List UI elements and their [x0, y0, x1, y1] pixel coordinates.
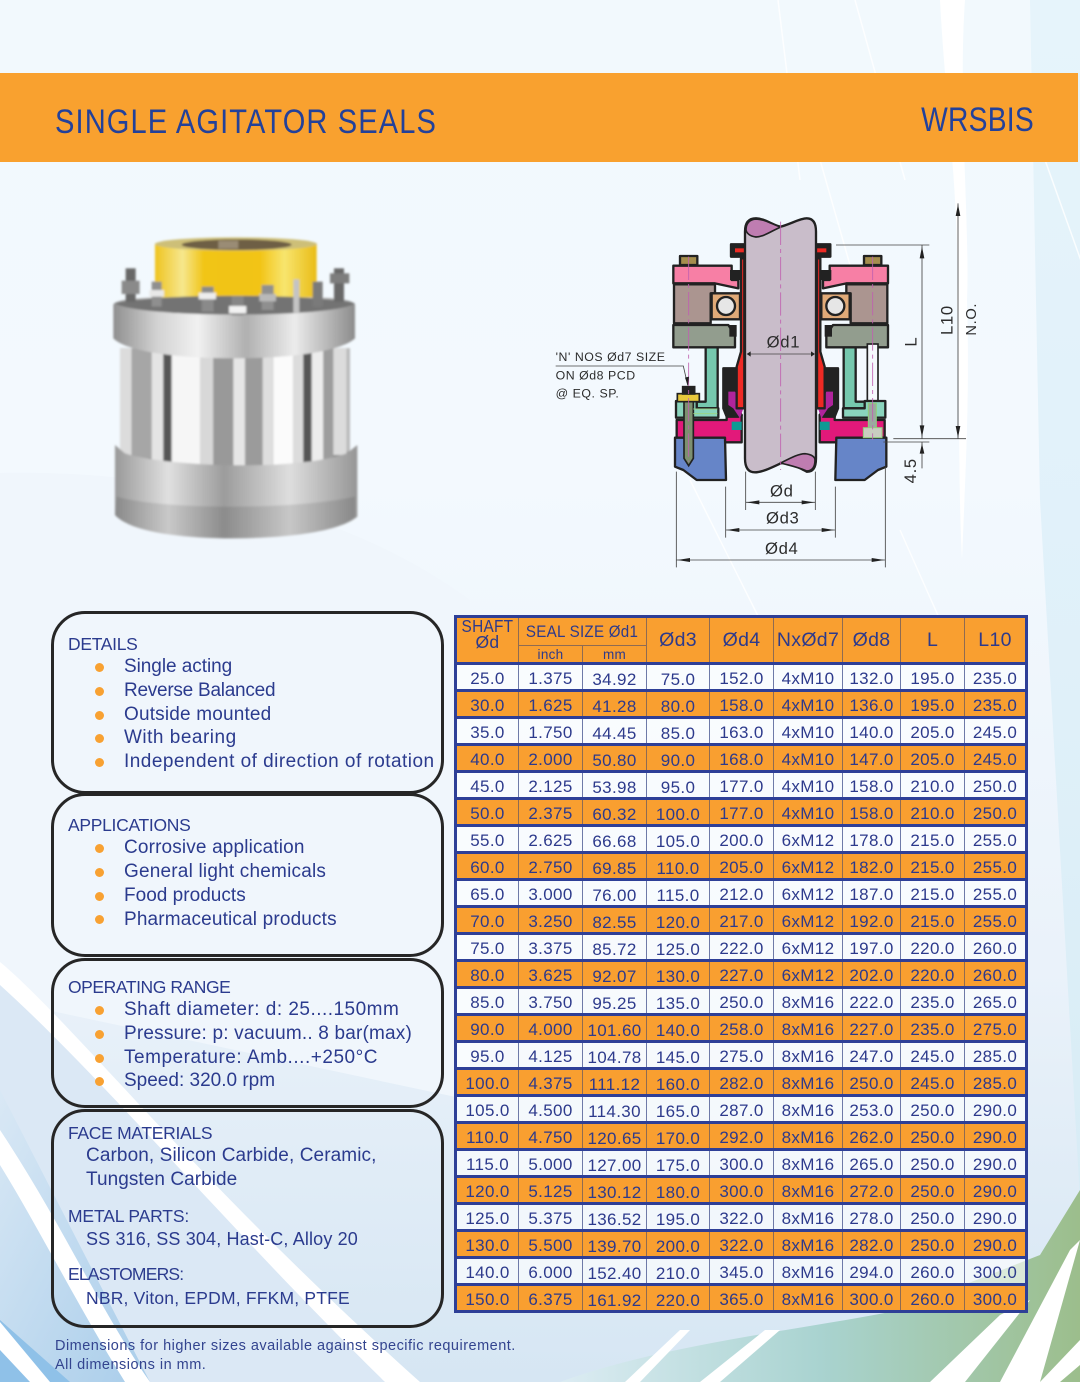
- dimensions table: 255.0: [973, 830, 1017, 850]
- dimensions table: 136.0: [849, 696, 894, 715]
- text: metal parts: SS 316, SS 304, Hast-C, Alloy 20: [86, 1229, 358, 1249]
- upper flange: [113, 297, 355, 358]
- panel: operating range: [51, 958, 444, 1108]
- dimensions table: 365.0: [719, 1290, 764, 1308]
- dimensions table: 300.0: [973, 1262, 1017, 1282]
- dimensions table: 215.0: [910, 912, 955, 930]
- dimensions table: 290.0: [973, 1236, 1017, 1254]
- dimensions table: 255.0: [973, 858, 1017, 876]
- dimensions table: 6xM12: [782, 885, 834, 904]
- dimensions table: 220.0: [656, 1291, 700, 1310]
- dimensions table: 227.0: [719, 966, 764, 984]
- dimensions table: 282.0: [849, 1236, 894, 1255]
- dimensions table: 85.0: [470, 992, 505, 1012]
- dimensions table: 290.0: [973, 1100, 1017, 1120]
- dimensions table: 95.0: [661, 778, 695, 797]
- list: details: Single acting: [124, 656, 232, 677]
- dimensions table: 6xM12: [782, 912, 834, 931]
- dimensions table: 294.0: [849, 1263, 894, 1282]
- dimensions table: 2.375: [528, 804, 573, 822]
- dimensions table: 95.25: [592, 994, 637, 1013]
- dimensions table: 258.0: [719, 1020, 764, 1038]
- footnote: All dimensions in mm.: [55, 1357, 206, 1373]
- dimensions table: 3.250: [528, 912, 573, 930]
- dimensions table: 105.0: [656, 832, 700, 851]
- flange top face: [115, 296, 355, 315]
- dimensions table: 290.0: [973, 1128, 1017, 1146]
- dimensions table: 245.0: [973, 750, 1017, 768]
- dimensions table: 215.0: [910, 830, 955, 850]
- dimensions table: 80.0: [661, 697, 695, 716]
- dimensions table: 250.0: [910, 1154, 955, 1174]
- dimensions table: 4.000: [528, 1020, 573, 1038]
- dimensions table: 250.0: [910, 1128, 955, 1146]
- dimensions table: 50.0: [470, 804, 505, 822]
- dimensions table: 222.0: [849, 993, 894, 1012]
- dimensions table: 250.0: [910, 1182, 955, 1200]
- dimensions table: 192.0: [849, 912, 894, 931]
- heading: operating range: OPERATING RANGE: [68, 977, 230, 997]
- dimensions table: 227.0: [849, 1020, 894, 1039]
- dimensions table: 6.375: [528, 1290, 573, 1308]
- heading: elastomers: ELASTOMERS:: [68, 1264, 183, 1284]
- dimensions table: 1.625: [528, 696, 573, 714]
- dimensions table: 4xM10: [782, 777, 834, 796]
- dimensions table: 101.60: [587, 1021, 642, 1040]
- dimensions table: 250.0: [910, 1236, 955, 1254]
- dimensions table: 6xM12: [782, 831, 834, 850]
- dimensions table: 210.0: [910, 776, 955, 796]
- dimensions table: 145.0: [656, 1048, 700, 1067]
- dimensions table: 135.0: [656, 994, 700, 1013]
- list: details: Reverse Balanced: [124, 680, 275, 701]
- right half of seal: [816, 244, 888, 480]
- callout: bolt note: [556, 350, 666, 401]
- dimensions table: 30.0: [470, 696, 505, 714]
- dimension labels: N.O.: [964, 303, 980, 336]
- dimensions table: 4xM10: [782, 804, 834, 823]
- dimension labels: L10: [938, 305, 957, 335]
- dimension lines and arrows: [556, 203, 966, 567]
- tie rod on right side: [863, 344, 882, 438]
- dimensions table: 147.0: [849, 750, 894, 769]
- dimensions table: 260.0: [973, 966, 1017, 984]
- title: SINGLE AGITATOR SEALS: [55, 103, 437, 141]
- product code: WRSBIS: [921, 101, 1034, 139]
- dimensions table: 250.0: [910, 1100, 955, 1120]
- dimensions table: [454, 615, 1028, 1313]
- dimensions table: 104.78: [587, 1048, 642, 1067]
- dimension labels: [765, 303, 980, 558]
- list: details: Independent of direction of rotation: [124, 751, 435, 772]
- dimension labels: L: [902, 337, 921, 347]
- dimensions table: 25.0: [470, 668, 505, 688]
- dimensions table: 5.500: [528, 1236, 573, 1254]
- dimensions table: 300.0: [849, 1290, 894, 1309]
- dimension labels: 4.5: [901, 458, 920, 483]
- dimensions table: 6xM12: [782, 939, 834, 958]
- cage with bars: [120, 348, 350, 472]
- dimensions table: 158.0: [719, 696, 764, 714]
- dimensions table: 8xM16: [782, 1047, 834, 1066]
- dimensions table: 265.0: [973, 992, 1017, 1012]
- bolts: [122, 268, 349, 315]
- dimensions table: 182.0: [849, 858, 894, 877]
- list: applications: General light chemicals: [124, 861, 326, 882]
- dimensions table: 100.0: [656, 805, 700, 824]
- dimensions table: 275.0: [973, 1020, 1017, 1038]
- dimensions table: 278.0: [849, 1209, 894, 1228]
- dimensions table: 287.0: [719, 1100, 764, 1120]
- dimensions table: 235.0: [973, 696, 1017, 714]
- dimensions table: 205.0: [719, 858, 764, 876]
- dimensions table: 3.625: [528, 966, 573, 984]
- dimensions table: 250.0: [719, 992, 764, 1012]
- dimensions table: 2.750: [528, 858, 573, 876]
- list: details: Outside mounted: [124, 704, 271, 725]
- dimensions table: 290.0: [973, 1154, 1017, 1174]
- dimensions table: 8xM16: [782, 1236, 834, 1255]
- dimensions table: 140.0: [465, 1262, 510, 1282]
- dimensions table: 66.68: [592, 832, 637, 851]
- dimensions table: 127.00: [587, 1156, 642, 1175]
- dimensions table: 222.0: [719, 938, 764, 958]
- dimensions table: 158.0: [849, 777, 894, 796]
- dimensions table: 163.0: [719, 722, 764, 742]
- dimensions table: 90.0: [661, 751, 695, 770]
- dimensions table: 195.0: [910, 668, 955, 688]
- dimensions table: 110.0: [466, 1128, 509, 1146]
- heading: applications: APPLICATIONS: [68, 815, 190, 835]
- dimensions table: 85.72: [592, 940, 637, 959]
- product photo: [112, 236, 359, 540]
- footnote: Dimensions for higher sizes available against specific requirement.: [55, 1338, 516, 1354]
- dimensions table: Ød8: [853, 628, 890, 650]
- dimensions table: 285.0: [973, 1074, 1017, 1092]
- dimensions table: 65.0: [470, 884, 505, 904]
- dimensions table: 125.0: [656, 940, 700, 959]
- dimensions table: 3.375: [528, 938, 573, 958]
- dimensions table: 260.0: [973, 938, 1017, 958]
- dimensions table: 6.000: [528, 1262, 573, 1282]
- dimensions table: 300.0: [719, 1154, 764, 1174]
- dimensions table: 250.0: [973, 776, 1017, 796]
- dimensions table: 250.0: [973, 804, 1017, 822]
- dimensions table: 2.625: [528, 830, 573, 850]
- dimensions table: 130.0: [656, 967, 700, 986]
- list: operating range: Shaft diameter: d: 25....150mm: [124, 999, 399, 1020]
- dimensions table: L: [927, 628, 938, 650]
- dimensions table: 120.65: [587, 1129, 642, 1148]
- dimensions table: 255.0: [973, 912, 1017, 930]
- dimensions table: 70.0: [470, 912, 505, 930]
- dimensions table: 205.0: [910, 722, 955, 742]
- yellow collar: [155, 237, 317, 302]
- dimensions table: 210.0: [910, 804, 955, 822]
- dimensions table: SEAL SIZE Ød1: [526, 622, 639, 640]
- dimensions table: 200.0: [719, 830, 764, 850]
- dimensions table: 235.0: [910, 992, 955, 1012]
- dimensions table: 8xM16: [782, 1209, 834, 1228]
- dimensions table: 136.52: [587, 1210, 642, 1229]
- dimensions table: 6xM12: [782, 858, 834, 877]
- list: applications: Food products: [124, 885, 246, 906]
- shaft: [745, 218, 816, 472]
- dimensions table: 4xM10: [782, 750, 834, 769]
- dimensions table: 322.0: [719, 1208, 764, 1228]
- heading: face materials: FACE MATERIALS: [68, 1123, 212, 1143]
- dimensions table: 1.375: [528, 668, 573, 688]
- dimensions table: 60.32: [592, 805, 637, 824]
- text: face materials: Carbon, Silicon Carbide, Ceramic,: [86, 1145, 377, 1166]
- header band: [0, 73, 1078, 162]
- dimensions table: 245.0: [973, 722, 1017, 742]
- dimensions table: 235.0: [910, 1020, 955, 1038]
- dimensions table: 75.0: [470, 938, 505, 958]
- dimensions table: Ød4: [723, 628, 760, 650]
- centre lines: [689, 222, 873, 470]
- dimensions table: 260.0: [910, 1262, 955, 1282]
- dimensions table: 220.0: [910, 966, 955, 984]
- dimensions table: 8xM16: [782, 1155, 834, 1174]
- dimensions table: 60.0: [470, 858, 505, 876]
- dimensions table: 290.0: [973, 1182, 1017, 1200]
- dimensions table: 35.0: [470, 722, 505, 742]
- dimensions table: 110.0: [656, 859, 700, 878]
- dimensions table: 8xM16: [782, 993, 834, 1012]
- dimensions table: 4.500: [528, 1100, 573, 1120]
- dimensions table: 215.0: [910, 884, 955, 904]
- dimensions table: 45.0: [470, 776, 505, 796]
- dimensions table: 165.0: [656, 1102, 700, 1121]
- dimensions table: 5.000: [528, 1154, 573, 1174]
- dimensions table: 197.0: [849, 939, 894, 958]
- dimensions table: 202.0: [849, 966, 894, 985]
- dimensions table: 160.0: [656, 1075, 700, 1094]
- dimension labels: Ød1: [767, 333, 800, 352]
- dimensions table: 235.0: [973, 668, 1017, 688]
- dimensions table: 187.0: [849, 885, 894, 904]
- dimensions table: 82.55: [592, 913, 637, 932]
- dimensions table: L10: [978, 628, 1012, 650]
- dimensions table: NxØd7: [777, 628, 839, 650]
- dimensions table: 265.0: [849, 1155, 894, 1174]
- list: operating range: Temperature: Amb....+250°C: [124, 1047, 378, 1068]
- dimensions table: 132.0: [849, 669, 894, 688]
- dimensions table: 177.0: [719, 804, 764, 822]
- dimensions table: 217.0: [719, 912, 764, 930]
- lower housing: [115, 445, 357, 538]
- dimensions table: 8xM16: [782, 1020, 834, 1039]
- dimensions table: 75.0: [661, 670, 695, 689]
- dimensions table: 115.0: [656, 886, 700, 905]
- dimension labels: Ød4: [765, 539, 798, 558]
- dimensions table: 8xM16: [782, 1074, 834, 1093]
- dimensions table: 92.07: [592, 967, 637, 986]
- dimensions table: 292.0: [719, 1128, 764, 1146]
- dimensions table: 55.0: [470, 830, 505, 850]
- arrowheads: [677, 204, 960, 562]
- dimensions table: 245.0: [910, 1046, 955, 1066]
- dimensions table: 80.0: [470, 966, 505, 984]
- text: face materials: Tungsten Carbide: [86, 1169, 237, 1190]
- callout: bolt note: ON Ød8 PCD: [556, 368, 636, 382]
- dimensions table: 139.70: [587, 1237, 642, 1256]
- left half of seal: [673, 244, 745, 480]
- dimensions table: 170.0: [656, 1129, 700, 1148]
- dimensions table: 8xM16: [782, 1128, 834, 1147]
- footnote: [55, 1338, 516, 1373]
- dimensions table: 4xM10: [782, 669, 834, 688]
- dimensions table: 8xM16: [782, 1263, 834, 1282]
- dimensions table: 253.0: [849, 1101, 894, 1120]
- dimensions table: 115.0: [466, 1154, 509, 1174]
- dimension labels: Ød: [770, 482, 794, 501]
- sectional drawing of seal: [556, 203, 980, 568]
- dimensions table: 2.000: [528, 750, 573, 768]
- dimensions table: 3.000: [528, 884, 573, 904]
- dimensions table: Ød: [476, 632, 499, 652]
- dimensions table: 262.0: [849, 1128, 894, 1147]
- dimensions table: 152.0: [719, 668, 764, 688]
- dimensions table: 8xM16: [782, 1101, 834, 1120]
- dimensions table: SHAFT: [462, 616, 513, 636]
- dimensions table: 120.0: [465, 1182, 510, 1200]
- dimensions table: mm: [603, 646, 626, 662]
- dimensions table: 275.0: [719, 1046, 764, 1066]
- dimensions table: Ød3: [659, 628, 697, 650]
- dimensions table: 140.0: [656, 1021, 700, 1040]
- dimensions table: 205.0: [910, 750, 955, 768]
- dimensions table: 5.125: [528, 1182, 573, 1200]
- dimensions table: 290.0: [973, 1208, 1017, 1228]
- hold-down bolt on left side: [677, 387, 717, 466]
- heading: details: DETAILS: [68, 634, 138, 654]
- dimensions table: 212.0: [719, 884, 764, 904]
- dimensions table: 130.0: [465, 1236, 510, 1254]
- dimensions table: 272.0: [849, 1182, 894, 1201]
- dimensions table: 215.0: [910, 858, 955, 876]
- callout: bolt note: @ EQ. SP.: [556, 387, 619, 401]
- list: applications: [95, 837, 337, 930]
- dimensions table: 1.750: [528, 722, 573, 742]
- dimensions table: 4xM10: [782, 723, 834, 742]
- dimensions table: 50.80: [592, 751, 637, 770]
- dimensions table: 195.0: [656, 1210, 700, 1229]
- panel: materials: [51, 1109, 444, 1328]
- dimensions table: 4.750: [528, 1128, 573, 1146]
- text: face materials: [86, 1145, 377, 1190]
- dimensions table: 2.125: [528, 776, 573, 796]
- dimensions table: 178.0: [849, 831, 894, 850]
- dimensions table: 76.00: [592, 886, 637, 905]
- dimensions table: 8xM16: [782, 1290, 834, 1309]
- dimensions table: 152.40: [587, 1264, 642, 1283]
- text: elastomers: NBR, Viton, EPDM, FFKM, PTFE: [86, 1288, 350, 1308]
- dimensions table: 8xM16: [782, 1182, 834, 1201]
- dimensions table: 41.28: [592, 697, 637, 716]
- dimensions table: 140.0: [849, 723, 894, 742]
- dimensions table: 250.0: [910, 1208, 955, 1228]
- dimensions table: 150.0: [465, 1290, 510, 1308]
- dimension labels: Ød3: [766, 508, 799, 527]
- dimensions table: 210.0: [656, 1264, 700, 1283]
- dimensions table: 34.92: [592, 670, 637, 689]
- dimensions table: 125.0: [465, 1208, 510, 1228]
- dimensions table: 260.0: [910, 1290, 955, 1308]
- dimensions table: 4.125: [528, 1046, 573, 1066]
- dimensions table: 177.0: [719, 776, 764, 796]
- dimensions table: 40.0: [470, 750, 505, 768]
- dimensions table: 6xM12: [782, 966, 834, 985]
- dimensions table: 69.85: [592, 859, 637, 878]
- dimensions table: 255.0: [973, 884, 1017, 904]
- dimensions table: 175.0: [656, 1156, 700, 1175]
- dimensions table: 105.0: [465, 1100, 510, 1120]
- dimensions table: 180.0: [656, 1183, 700, 1202]
- dimensions table: 322.0: [719, 1236, 764, 1254]
- list: operating range: Speed: 320.0 rpm: [124, 1070, 275, 1091]
- dimensions table: 158.0: [849, 804, 894, 823]
- dimensions table: 195.0: [910, 696, 955, 714]
- dimensions table: 120.0: [656, 913, 700, 932]
- dimensions table: 44.45: [592, 724, 637, 743]
- panel: applications: [51, 794, 444, 957]
- dimensions table: 200.0: [656, 1237, 700, 1256]
- dimensions table: 220.0: [910, 938, 955, 958]
- dimensions table: 247.0: [849, 1047, 894, 1066]
- dimensions table: 250.0: [849, 1074, 894, 1093]
- dimensions table: 3.750: [528, 992, 573, 1012]
- dimensions table: 282.0: [719, 1074, 764, 1092]
- dimensions table: 114.30: [588, 1102, 641, 1121]
- dimensions table: 111.12: [589, 1075, 640, 1094]
- dimensions table: 100.0: [465, 1074, 510, 1092]
- list: operating range: [95, 999, 412, 1091]
- dimensions table: 85.0: [661, 724, 695, 743]
- dimensions table: 285.0: [973, 1046, 1017, 1066]
- list: details: With bearing: [124, 727, 237, 748]
- dimensions table: 168.0: [719, 750, 764, 768]
- list: applications: Pharmaceutical products: [124, 909, 337, 930]
- dimensions table: 130.12: [587, 1183, 642, 1202]
- dimensions table: 4xM10: [782, 696, 834, 715]
- list: operating range: Pressure: p: vacuum.. 8 bar(max): [124, 1023, 412, 1044]
- dimensions table: 4.375: [528, 1074, 573, 1092]
- dimensions table: 90.0: [470, 1020, 505, 1038]
- dimensions table: 5.375: [528, 1208, 573, 1228]
- list: details: [95, 656, 435, 772]
- panel: details: [51, 611, 444, 794]
- dimensions table: inch: [538, 646, 563, 662]
- list: applications: Corrosive application: [124, 837, 305, 858]
- dimensions table: 300.0: [719, 1182, 764, 1200]
- heading: metal parts: METAL PARTS:: [68, 1206, 189, 1226]
- dimensions table: 53.98: [592, 778, 637, 797]
- dimensions table: 161.92: [587, 1291, 642, 1310]
- dimensions table: 300.0: [973, 1290, 1017, 1308]
- dimensions table: 345.0: [719, 1262, 764, 1282]
- dimensions table: 245.0: [910, 1074, 955, 1092]
- callout: bolt note: 'N' NOS Ød7 SIZE: [556, 350, 666, 364]
- dimensions table: 95.0: [470, 1046, 505, 1066]
